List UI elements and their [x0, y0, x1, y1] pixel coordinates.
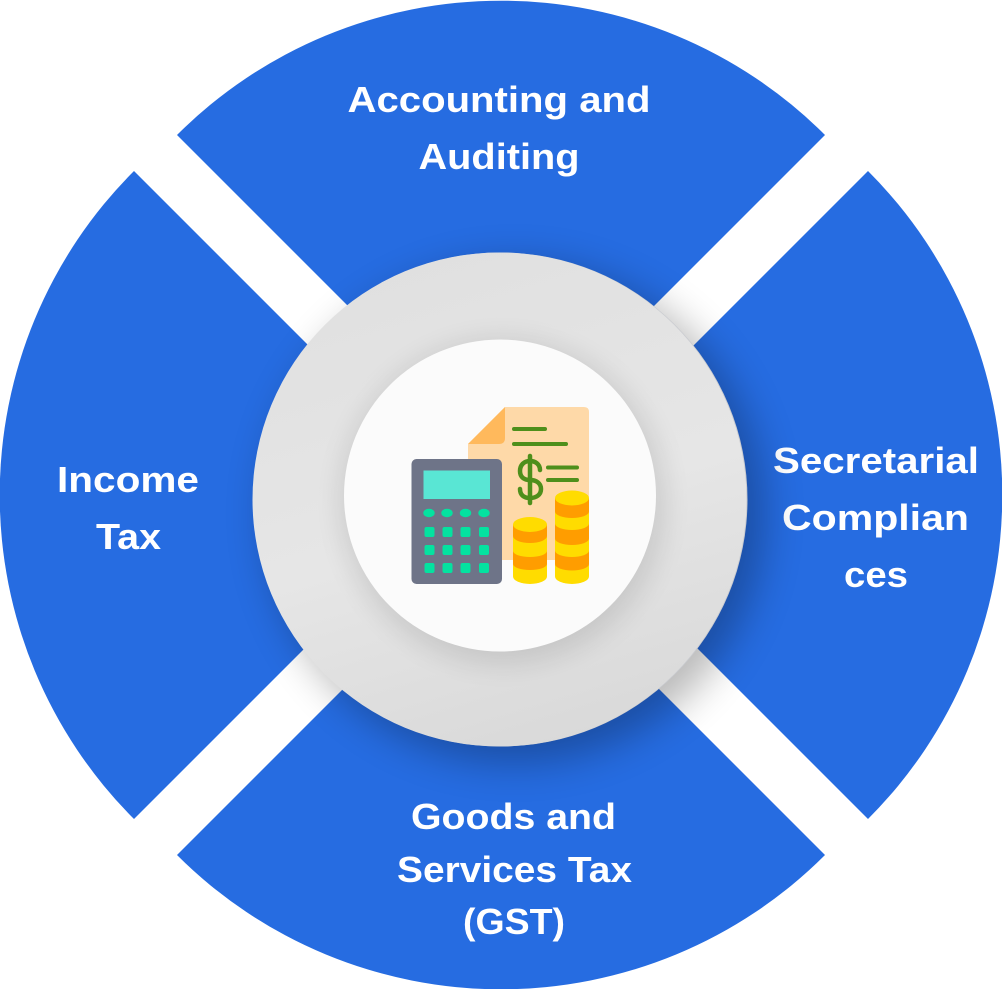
icon: invoice, calculator and coins: [412, 407, 589, 584]
icon: calculator: [412, 459, 502, 584]
label: Income Tax: [57, 459, 199, 557]
center disc shadow: [265, 263, 765, 763]
panel: Secretarial Compliances: [544, 171, 1002, 819]
label: Income Tax: Income: [57, 459, 199, 500]
label: Secretarial Compliances: Secretarial: [773, 440, 979, 481]
label: Accounting and Auditing: Accounting and: [348, 79, 650, 120]
center disc: outer ring: [252, 252, 748, 746]
label: Secretarial Compliances: [773, 440, 979, 595]
inner disc shadow: [340, 339, 666, 665]
icon: tall coin stack: [555, 490, 589, 584]
icon: small coin stack: [513, 517, 547, 584]
label: Accounting and Auditing: Auditing: [418, 136, 580, 177]
label: Income Tax: Tax: [96, 516, 161, 557]
label: Goods and Services Tax (GST): [397, 796, 632, 942]
center disc: inner white circle: [344, 340, 656, 652]
panel: Goods and Services Tax (GST): [177, 531, 825, 989]
label: Goods and Services Tax (GST): (GST): [463, 901, 565, 942]
label: Secretarial Compliances: ces: [844, 554, 908, 595]
label: Secretarial Compliances: Complian: [782, 497, 969, 538]
label: Goods and Services Tax (GST): Goods and: [411, 796, 616, 837]
icon: document: [468, 407, 589, 560]
label: Goods and Services Tax (GST): Services Tax: [397, 849, 632, 890]
label: Accounting and Auditing: [348, 79, 650, 177]
panel: Accounting and Auditing: [177, 1, 825, 459]
panel: Income Tax: [0, 171, 458, 819]
